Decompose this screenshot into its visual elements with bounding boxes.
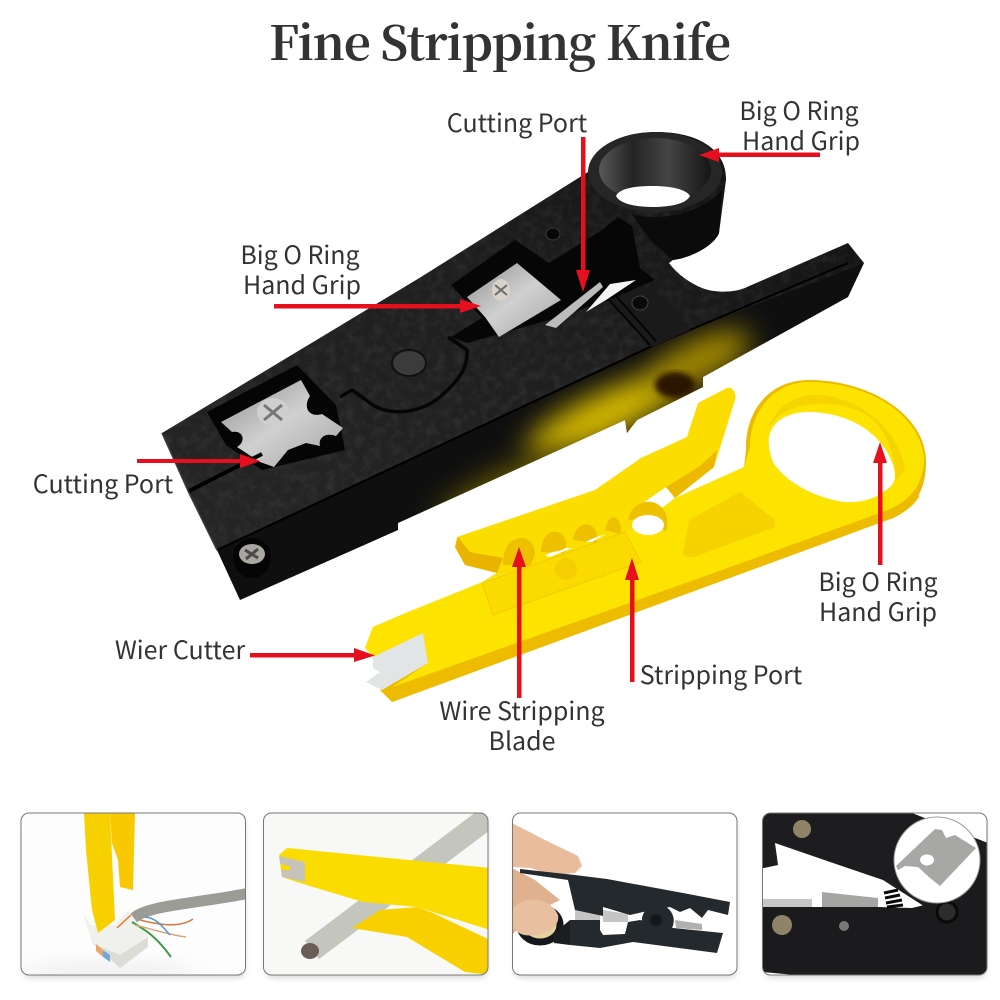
black cable stripper tool xyxy=(150,130,870,610)
photo panel: stripping a cable xyxy=(263,812,495,978)
ring inner wall xyxy=(768,395,905,480)
comb white gaps xyxy=(545,534,606,557)
screws xyxy=(793,820,811,838)
upper jaw xyxy=(520,869,730,918)
title: Fine Stripping Knife xyxy=(269,7,731,74)
silver blades xyxy=(822,892,878,907)
photo panel: blade close-up xyxy=(762,813,988,978)
jack colour block xyxy=(103,950,110,962)
cable end xyxy=(301,943,319,959)
fingers xyxy=(512,823,582,875)
label: ring grip right: Big O Ring xyxy=(818,563,938,599)
blade xyxy=(279,856,305,882)
grey cable xyxy=(135,893,250,917)
callout labels: Hand Grip xyxy=(243,266,361,302)
callout labels xyxy=(33,92,938,758)
upper comb arm xyxy=(455,388,735,582)
left end bevel xyxy=(162,433,217,550)
label: ring grip left: Big O Ring xyxy=(240,236,360,272)
surface texture xyxy=(164,180,856,540)
white inset circle xyxy=(894,817,980,903)
arrow: ring grip left xyxy=(274,299,481,313)
yellow tool xyxy=(84,813,115,933)
front side face with yellow reflection xyxy=(217,263,864,600)
corner screw xyxy=(233,538,271,578)
round hole xyxy=(632,515,664,535)
photo panel: hand holding tool xyxy=(512,813,738,978)
label: wire stripping blade: Wire Stripping xyxy=(439,692,605,728)
upper blade window xyxy=(451,217,655,343)
ring hole xyxy=(769,412,895,502)
grip recess xyxy=(683,492,775,557)
ring handle xyxy=(588,132,722,260)
arrow: wire stripping blade xyxy=(512,547,526,698)
shaded under body xyxy=(365,380,926,702)
sliding cover xyxy=(482,532,641,615)
comb lower shaded edge xyxy=(455,537,503,573)
arrow: ring grip right xyxy=(873,442,887,565)
lower jaw xyxy=(570,920,723,953)
arrow: cutting port left xyxy=(137,454,260,468)
yellow tool upper xyxy=(279,848,490,930)
label: wire cutter: Wier Cutter xyxy=(115,631,245,667)
tool ring xyxy=(520,908,560,942)
arrow: wire cutter xyxy=(250,648,375,662)
callout labels: Blade xyxy=(489,722,555,758)
red arrows xyxy=(137,137,887,698)
thumb xyxy=(513,900,558,935)
yellow wire stripper tool xyxy=(365,380,926,702)
hinge plate and pin xyxy=(340,337,467,412)
comb notches xyxy=(503,502,667,566)
callout labels: Hand Grip xyxy=(742,122,860,158)
arrow: stripping port xyxy=(625,558,639,682)
lower black body xyxy=(763,861,986,974)
main yellow face xyxy=(365,382,924,692)
label: cutting port left: Cutting Port xyxy=(33,465,174,501)
upper black body xyxy=(762,813,988,910)
grey cable xyxy=(312,812,495,950)
photo panel: cutting network jack xyxy=(20,813,250,982)
hinge disc xyxy=(642,908,674,928)
wires xyxy=(117,915,193,957)
raised collar block xyxy=(609,283,690,347)
jack module xyxy=(84,910,148,955)
tool body silhouette xyxy=(162,132,864,600)
blade inserts xyxy=(575,910,628,922)
bottom edge shade xyxy=(384,495,920,702)
silver blade xyxy=(366,633,428,690)
top face edge xyxy=(217,263,848,550)
label: ring grip top: Big O Ring xyxy=(739,92,859,128)
label: stripping port: Stripping Port xyxy=(640,656,803,692)
arrow: ring grip top xyxy=(699,148,820,162)
jaw slit xyxy=(189,454,262,491)
inset razor blade xyxy=(896,829,976,886)
callout labels: Hand Grip xyxy=(819,593,937,629)
yellow tool lower comb xyxy=(352,907,490,975)
label: cutting port top: Cutting Port xyxy=(447,104,588,140)
arrow: cutting port top xyxy=(576,137,590,292)
lower blade window xyxy=(207,365,345,470)
spring xyxy=(884,890,903,907)
